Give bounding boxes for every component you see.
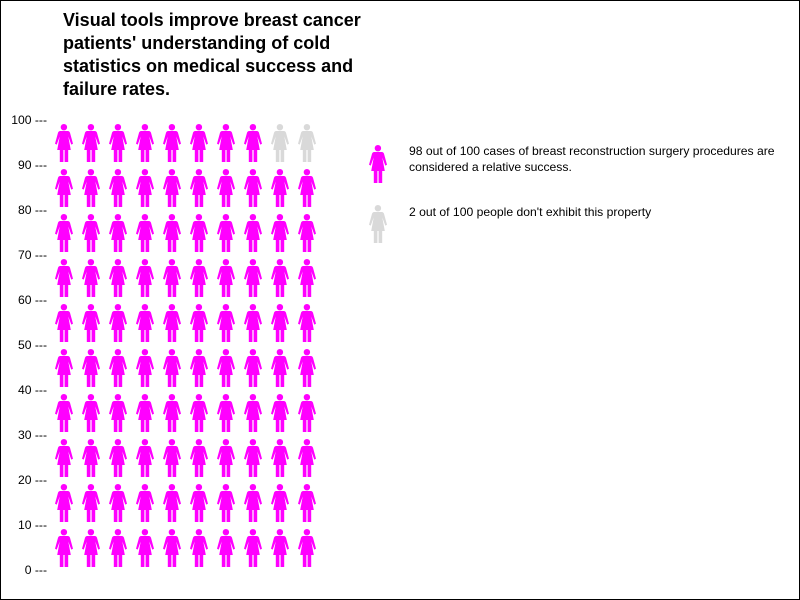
title: Visual tools improve breast cancer (63, 10, 361, 30)
legend text: remainder: 2 out of 100 people don't exhibit this property (409, 205, 652, 219)
row 80 to 70 (55, 214, 316, 252)
y axis labels: 20 --- (18, 473, 47, 487)
title: failure rates. (63, 79, 170, 99)
y axis labels: 10 --- (18, 518, 47, 532)
y axis labels: 100 --- (11, 113, 47, 127)
row 30 to 20 (55, 439, 316, 477)
row 60 to 50 (55, 304, 316, 342)
y axis labels: 50 --- (18, 338, 47, 352)
title (63, 10, 361, 99)
pictogram chart: 100 people (55, 124, 316, 567)
row 20 to 10 (55, 484, 316, 522)
legend text: success (409, 144, 775, 174)
legend icon: grey person (369, 205, 387, 243)
row 100 to 90: 8 magenta, 2 grey (55, 124, 316, 162)
y axis labels: 80 --- (18, 203, 47, 217)
row 50 to 40 (55, 349, 316, 387)
row 10 to 0 (55, 529, 316, 567)
y axis labels: 90 --- (18, 158, 47, 172)
legend text: success: 98 out of 100 cases of breast reconstruction surgery procedures are (409, 144, 775, 158)
title: statistics on medical success and (63, 56, 353, 76)
row 90 to 80 (55, 169, 316, 207)
y axis labels (11, 113, 47, 577)
y axis labels: 0 --- (25, 563, 47, 577)
row 40 to 30 (55, 394, 316, 432)
legend icon: magenta person (369, 145, 387, 183)
y axis labels: 40 --- (18, 383, 47, 397)
legend text: success: considered a relative success. (409, 160, 572, 174)
y axis labels: 70 --- (18, 248, 47, 262)
y axis labels: 60 --- (18, 293, 47, 307)
title: patients' understanding of cold (63, 33, 330, 53)
row 70 to 60 (55, 259, 316, 297)
y axis labels: 30 --- (18, 428, 47, 442)
